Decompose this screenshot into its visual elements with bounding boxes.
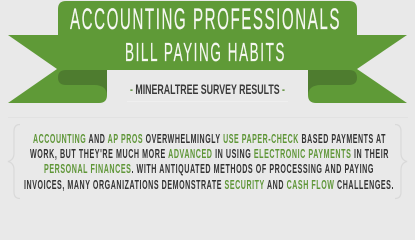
left ribbon fold bbox=[58, 70, 107, 96]
right ribbon fold bbox=[308, 70, 357, 96]
left curly brace bbox=[8, 124, 20, 198]
title ribbon bbox=[8, 1, 407, 103]
body paragraph bbox=[24, 132, 394, 192]
right ribbon tail bbox=[308, 35, 407, 103]
right curly brace bbox=[395, 124, 407, 198]
paragraph line 2: WORK, BUT THEY'RE MUCH MORE ADVANCED IN USING ELECTRONIC PAYMENTS IN THEIR bbox=[30, 147, 389, 161]
ribbon main band bbox=[58, 1, 357, 70]
left ribbon tail bbox=[8, 35, 107, 103]
survey results label: - MINERALTREE SURVEY RESULTS - bbox=[130, 81, 285, 97]
